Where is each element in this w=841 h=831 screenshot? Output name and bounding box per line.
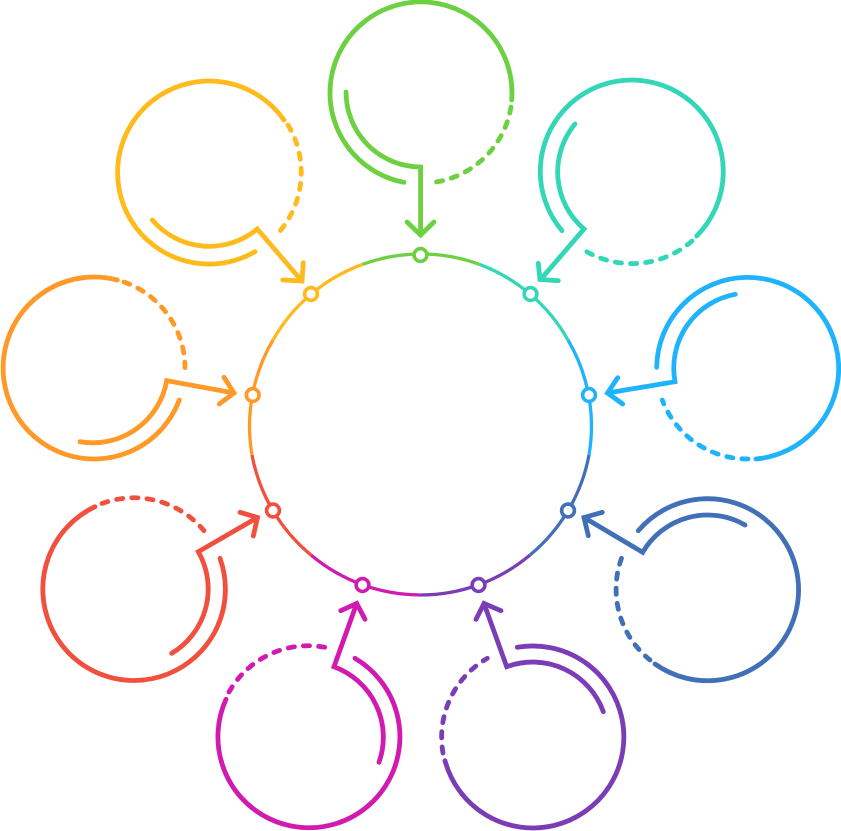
central ring (250, 254, 591, 595)
magenta circle with arrow (218, 604, 400, 828)
purple circle with arrow (442, 604, 624, 828)
blue circle with arrow (608, 277, 839, 459)
teal circle with arrow (538, 80, 723, 281)
node: purple (472, 579, 485, 591)
yellow circle with arrow (118, 81, 303, 281)
node: navy (562, 504, 574, 517)
green circle with arrow (330, 2, 512, 235)
node: orange (246, 389, 259, 401)
node: teal (524, 288, 537, 300)
node: magenta (356, 579, 369, 591)
orange circle with arrow (3, 277, 234, 459)
navy circle with arrow (584, 499, 799, 681)
red circle with arrow (43, 498, 258, 681)
node: blue (583, 389, 595, 401)
node: red (267, 504, 279, 517)
node: green (414, 249, 427, 261)
node: yellow (305, 288, 317, 300)
